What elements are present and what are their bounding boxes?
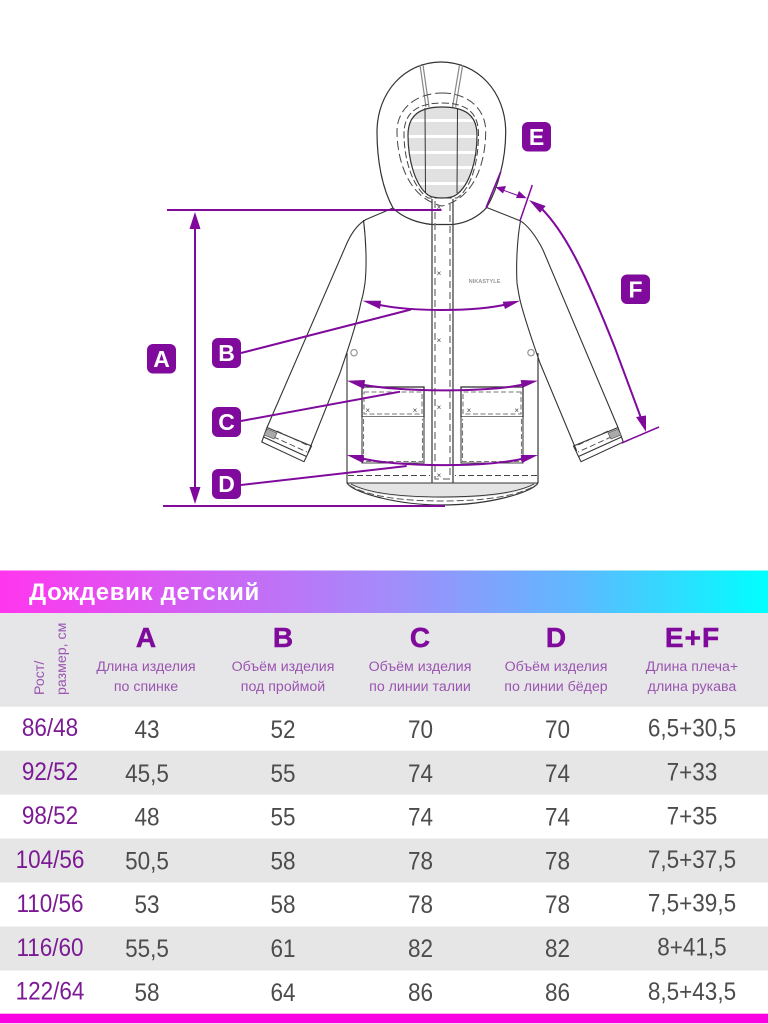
- stitch marks: ×: [437, 269, 442, 278]
- row 116/60: 61: [270, 935, 296, 963]
- stitch marks: ×: [437, 203, 442, 212]
- row 92/52: 92/52: [22, 758, 78, 786]
- column E+F heading: Длина плеча+: [646, 659, 738, 675]
- column E+F heading: E+F: [665, 622, 720, 653]
- badge C: [212, 407, 241, 437]
- badge E: E: [529, 124, 544, 150]
- row 110/56: 78: [408, 891, 433, 919]
- row 110/56: 7,5+39,5: [648, 890, 736, 918]
- row 110/56: 110/56: [16, 890, 84, 918]
- row 98/52: 74: [408, 803, 433, 832]
- panel: jacket technical drawing: [262, 62, 623, 505]
- stitch marks: ×: [413, 406, 418, 415]
- column D heading: по линии бёдер: [504, 679, 608, 695]
- column A heading: Длина изделия: [96, 659, 196, 675]
- column B heading: под проймой: [241, 679, 325, 695]
- row 98/52: [22, 802, 717, 832]
- row 104/56: 7,5+37,5: [648, 846, 736, 874]
- row 92/52: 7+33: [667, 758, 717, 787]
- height and size column heading: Рост/: [32, 661, 48, 695]
- column E+F heading: [646, 622, 738, 695]
- row 92/52: 74: [408, 760, 433, 788]
- row 116/60: 116/60: [16, 934, 84, 962]
- bottom magenta bar: [0, 1014, 768, 1023]
- jacket body and sleeves outline: [267, 208, 618, 483]
- badge F: [621, 274, 650, 304]
- row 110/56: [16, 890, 736, 919]
- left sleeve cuff, pocket and button: [262, 350, 430, 483]
- badge E: [522, 122, 551, 152]
- measure E: shoulder arrow: [486, 172, 532, 221]
- row 110/56: 53: [134, 891, 160, 919]
- badge B: [212, 338, 241, 368]
- stitch marks: ×: [514, 406, 519, 415]
- hood: [377, 62, 506, 224]
- hood opening with lining stripes: [408, 108, 476, 198]
- column A heading: по спинке: [114, 679, 178, 695]
- front placket: [432, 199, 453, 483]
- measure B: chest arc: [241, 301, 520, 353]
- measure A: length arrow: [163, 210, 445, 506]
- column C heading: [369, 622, 471, 695]
- column D heading: [504, 622, 608, 695]
- badge A: [147, 344, 176, 374]
- row 86/48: 70: [408, 716, 433, 744]
- column B heading: B: [273, 622, 293, 653]
- column A heading: A: [136, 622, 156, 653]
- title: Дождевик детский: [29, 579, 260, 606]
- badge C: C: [218, 409, 235, 435]
- row 122/64: [16, 977, 736, 1007]
- row 122/64: 86: [408, 979, 433, 1007]
- row 122/64: 64: [270, 979, 296, 1007]
- row 92/52: [22, 758, 717, 788]
- row 116/60: 8+41,5: [657, 934, 727, 962]
- row 104/56: 104/56: [16, 846, 84, 874]
- column D heading: Объём изделия: [505, 659, 607, 675]
- column A heading: [96, 622, 196, 695]
- badge B: B: [218, 340, 235, 366]
- row 122/64: 86: [545, 979, 570, 1007]
- row 104/56: 78: [545, 847, 570, 876]
- row 104/56: [16, 846, 736, 876]
- row 122/64: 122/64: [16, 977, 84, 1006]
- column B heading: [232, 622, 334, 695]
- row 122/64: 8,5+43,5: [648, 978, 736, 1006]
- measure C: waist arc: [241, 380, 538, 421]
- row 98/52: 55: [270, 803, 296, 832]
- column E+F heading: длина рукава: [648, 679, 736, 695]
- stitch marks: ×: [437, 471, 442, 480]
- measure D: hip arc: [241, 455, 538, 485]
- column C heading: C: [410, 622, 430, 653]
- measure F: sleeve arrow: [529, 200, 659, 443]
- row 104/56: 58: [270, 847, 296, 876]
- row 116/60: 55,5: [125, 935, 169, 963]
- stitch marks: ×: [437, 336, 442, 345]
- row 98/52: 7+35: [667, 802, 717, 831]
- height and size column heading: [32, 623, 70, 695]
- row 86/48: [22, 714, 736, 744]
- stitch marks: [365, 203, 519, 480]
- row 92/52: 74: [545, 760, 570, 788]
- badge F: F: [628, 276, 643, 302]
- row 98/52: 98/52: [22, 802, 78, 830]
- column C heading: по линии талии: [369, 679, 471, 695]
- row 110/56: 78: [545, 891, 570, 919]
- row 92/52: 45,5: [125, 760, 169, 788]
- row 86/48: 70: [545, 716, 570, 744]
- row 116/60: [16, 934, 727, 963]
- row 86/48: 86/48: [22, 714, 78, 742]
- row 116/60: 82: [545, 935, 570, 963]
- stitch marks: ×: [437, 403, 442, 412]
- badge D: D: [218, 471, 235, 497]
- column C heading: Объём изделия: [369, 659, 471, 675]
- title band: [0, 570, 768, 613]
- row 122/64: 58: [134, 979, 160, 1007]
- badge A: A: [153, 346, 170, 372]
- row 98/52: 74: [545, 803, 570, 832]
- height and size column heading: размер, см: [54, 623, 70, 695]
- brand label: NIKASTYLE: [469, 279, 501, 285]
- column B heading: Объём изделия: [232, 659, 334, 675]
- size table rows: [0, 714, 768, 1007]
- table header: [0, 613, 768, 707]
- row 86/48: 43: [134, 716, 160, 744]
- badge D: [212, 469, 241, 499]
- row 92/52: 55: [270, 760, 296, 788]
- row 104/56: 78: [408, 847, 433, 876]
- hem: [347, 483, 538, 505]
- stitch marks: ×: [365, 406, 370, 415]
- column D heading: D: [546, 622, 566, 653]
- stitch marks: ×: [467, 406, 472, 415]
- row 98/52: 48: [134, 803, 160, 832]
- row 110/56: 58: [270, 891, 296, 919]
- row 86/48: 52: [270, 716, 296, 744]
- row 116/60: 82: [408, 935, 433, 963]
- row 104/56: 50,5: [125, 847, 169, 876]
- right sleeve cuff, pocket and button: [455, 350, 623, 483]
- row 86/48: 6,5+30,5: [648, 714, 736, 743]
